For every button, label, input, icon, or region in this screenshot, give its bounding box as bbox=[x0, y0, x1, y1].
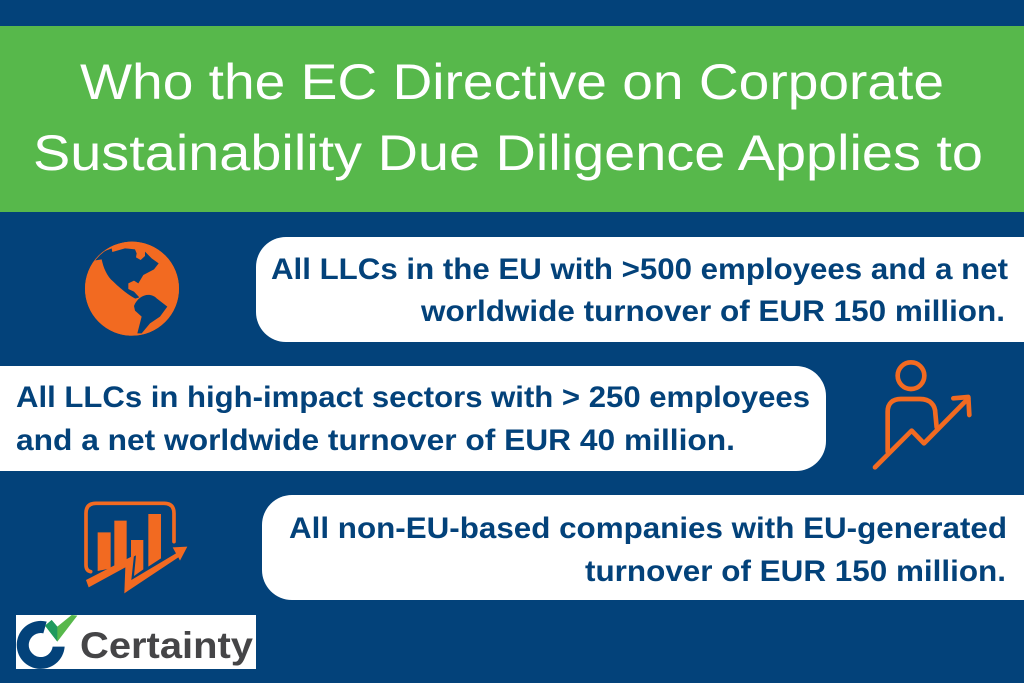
panel: non-EU companies: turnover of EUR 150 million. bbox=[585, 555, 1006, 588]
icon: logo ring and check bbox=[17, 615, 77, 669]
panel: non-EU companies: All non-EU-based companies with EU-generated bbox=[289, 512, 1007, 545]
icon: globe bbox=[85, 242, 179, 336]
title banner: Who the EC Directive on Corporate bbox=[80, 54, 944, 110]
icon: bar chart with arrow bbox=[86, 503, 187, 593]
panel: high-impact sectors: and a net worldwide turnover of EUR 40 million. bbox=[16, 424, 735, 457]
panel: EU LLCs bbox=[256, 237, 1024, 342]
panel: high-impact sectors bbox=[0, 366, 826, 471]
panel: EU LLCs: All LLCs in the EU with >500 employees and a net bbox=[271, 253, 1008, 286]
title banner bbox=[0, 26, 1024, 212]
panel: high-impact sectors: All LLCs in high-impact sectors with > 250 employees bbox=[16, 381, 810, 414]
title banner: Sustainability Due Diligence Applies to bbox=[33, 125, 983, 181]
logo: Certainty: Certainty bbox=[80, 625, 253, 666]
logo: Certainty bbox=[16, 615, 256, 669]
panel: non-EU companies bbox=[262, 495, 1024, 600]
panel: EU LLCs: worldwide turnover of EUR 150 million. bbox=[420, 295, 1005, 328]
icon: person with rising arrow bbox=[875, 362, 969, 467]
